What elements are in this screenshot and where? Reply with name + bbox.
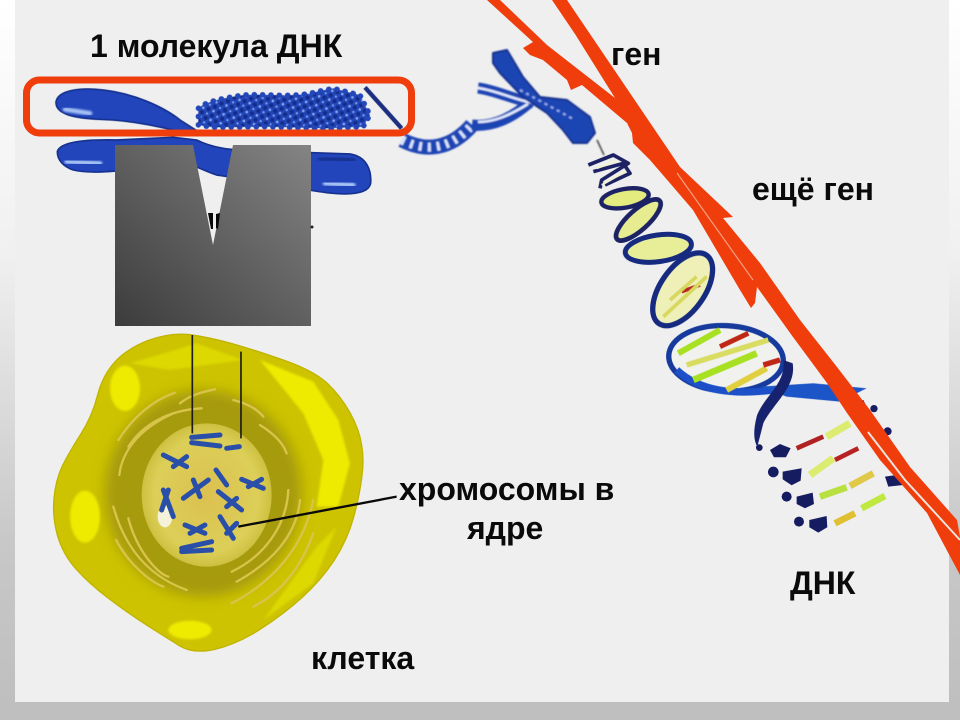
big lower turn <box>667 323 785 394</box>
label: 1 молекула ДНК: 1 молекула ДНК <box>90 28 343 64</box>
bright highlights <box>70 360 350 639</box>
text fragment in notch <box>208 213 220 229</box>
DNA double helix <box>588 155 867 447</box>
upper-left arm <box>56 89 197 133</box>
text fragment at block edge <box>310 226 314 228</box>
separated DNA bases <box>756 400 913 533</box>
label: клетка: клетка <box>311 640 414 676</box>
cell body <box>54 334 363 651</box>
label: ген: ген <box>611 36 661 72</box>
label: ДНК: ДНК <box>790 565 856 601</box>
coil and upper chromatin fibre <box>402 50 604 155</box>
organelle membranes <box>113 389 313 607</box>
condensed chromatin knot <box>198 88 370 128</box>
label: хромосомы в ядре: хромосомы в <box>399 471 614 507</box>
lower arms <box>57 137 371 194</box>
pale gap between strokes <box>677 173 753 280</box>
label: хромосомы в ядре: ядре <box>466 510 543 546</box>
red highlight frame <box>26 80 412 133</box>
gray cover block with notch <box>115 145 314 326</box>
cell <box>54 334 397 651</box>
red strike-through strokes <box>487 0 960 575</box>
chromosome <box>56 87 402 194</box>
label: хромосомы в ядре <box>399 471 614 546</box>
nuclear chromosomes <box>162 435 263 552</box>
leader lines <box>192 335 241 438</box>
olive ring round nucleus <box>105 390 302 597</box>
nucleus <box>142 423 272 567</box>
strand to coil <box>365 87 402 128</box>
ribbon tail <box>760 383 867 402</box>
label: ещё ген: ещё ген <box>752 171 874 207</box>
